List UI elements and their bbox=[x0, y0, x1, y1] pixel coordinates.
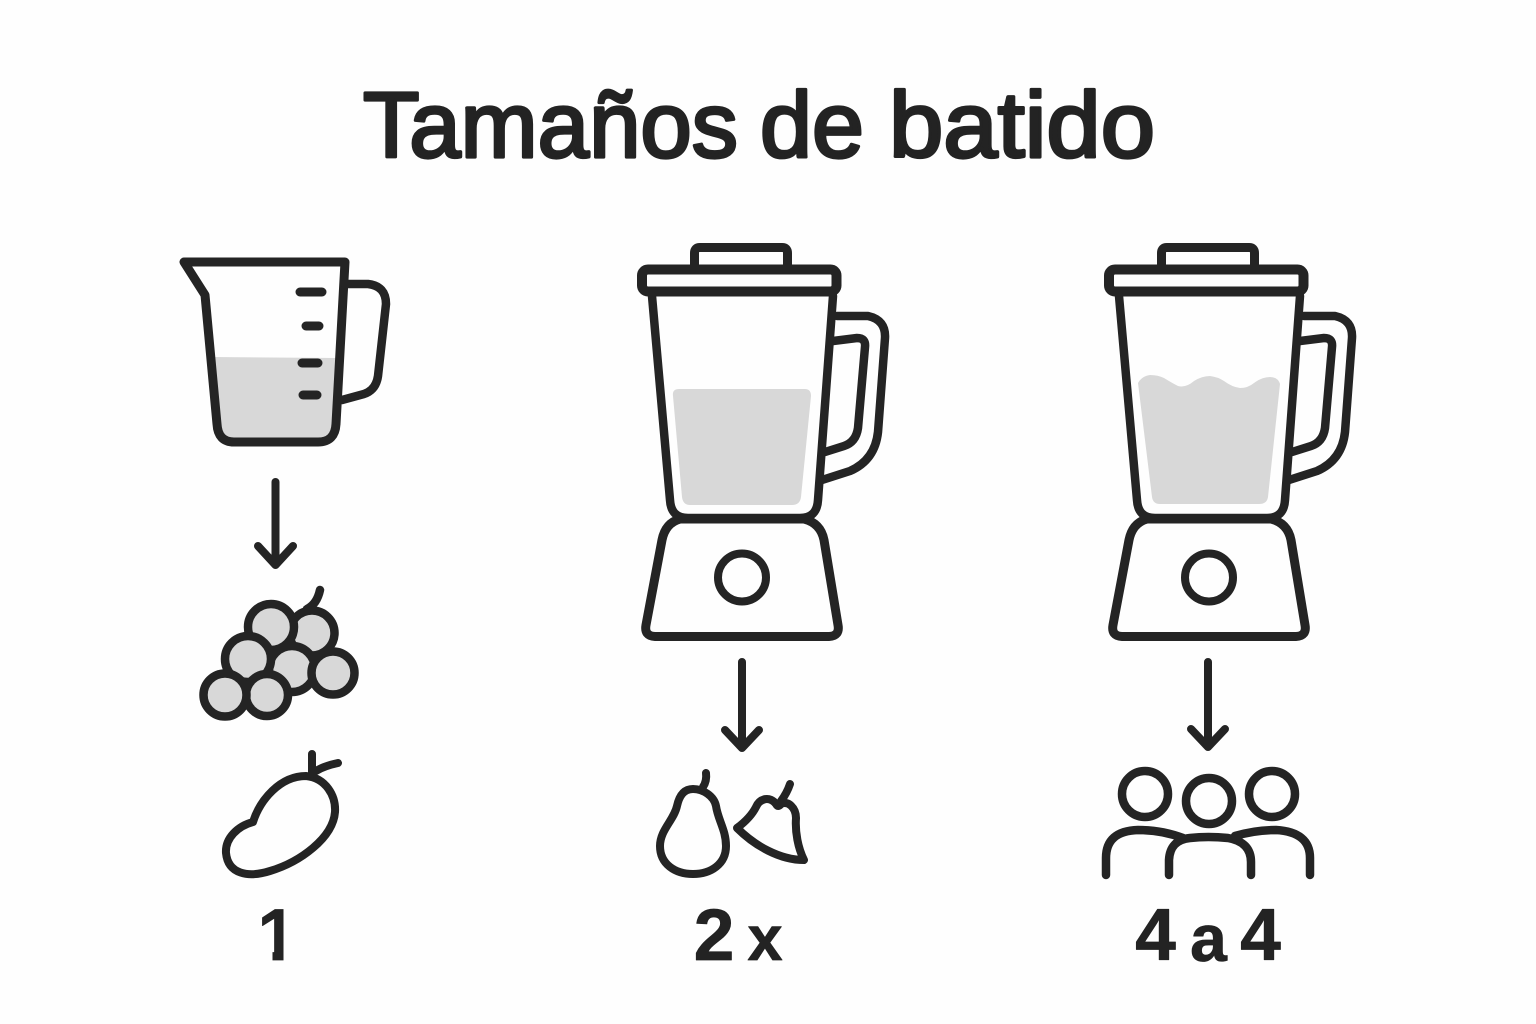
label: 1: 1 bbox=[258, 895, 298, 976]
arrow: blender to people bbox=[1191, 662, 1225, 747]
large blender column bbox=[1106, 248, 1352, 976]
icon: blender with waves bbox=[1109, 248, 1352, 636]
title: batido bbox=[889, 73, 1155, 177]
icon: grapes bbox=[204, 590, 354, 716]
medium blender column bbox=[642, 248, 885, 976]
label: 4 a 4: a bbox=[1190, 901, 1228, 975]
icon: three people bbox=[1106, 771, 1310, 875]
label: 4 a 4 bbox=[1135, 895, 1281, 976]
icon: pear bbox=[660, 773, 726, 874]
title: de bbox=[760, 73, 864, 177]
icon: measuring jug bbox=[184, 262, 386, 442]
arrow: blender to fruits bbox=[725, 662, 759, 748]
arrow: jug to grapes bbox=[258, 482, 293, 565]
icon: pepper bbox=[737, 784, 804, 860]
label: 2 x: x bbox=[747, 904, 783, 974]
label: 4 a 4: 4 bbox=[1135, 895, 1176, 976]
label: 2 x: 2 bbox=[694, 895, 734, 976]
measuring jug column bbox=[184, 262, 386, 976]
label: 2 x bbox=[694, 895, 783, 976]
icon: blender bbox=[642, 248, 885, 636]
title bbox=[363, 73, 1155, 177]
title: Tamaños bbox=[363, 73, 738, 177]
icon: mango bbox=[226, 754, 338, 874]
label: 4 a 4: 4 bbox=[1240, 895, 1281, 976]
